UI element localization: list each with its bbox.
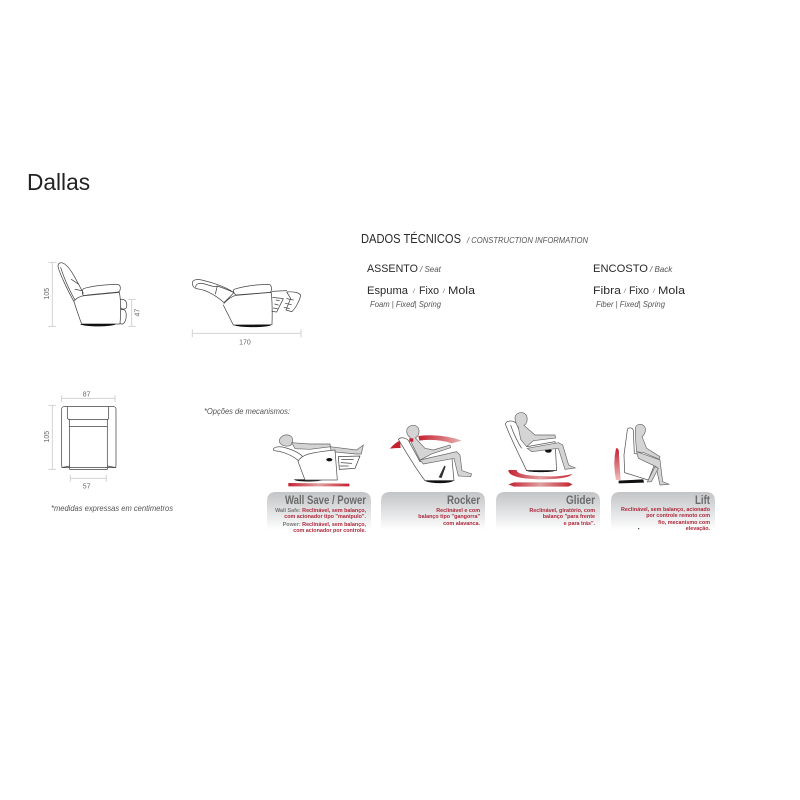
- drawing: side view upright: 47: [135, 309, 142, 317]
- note: measurements: *medidas expressas em centimetros: [51, 504, 173, 513]
- block: seat: Espuma: [367, 285, 409, 297]
- panel: wall save power: [267, 492, 371, 534]
- illustration: lift chair: [614, 424, 669, 485]
- block: seat: /: [412, 289, 416, 295]
- panel: rocker: Rocker: [447, 495, 480, 507]
- heading: technical data: / CONSTRUCTION INFORMATION: [466, 236, 588, 245]
- drawing: top view: 57: [83, 483, 91, 490]
- block: back: /: [623, 289, 627, 295]
- block: back: ENCOSTO: [593, 263, 648, 275]
- block: back: / Back: [649, 265, 673, 274]
- drawing: side view reclined: [192, 279, 301, 347]
- illustration: rocker chair: [390, 425, 472, 483]
- panel: wall save power: Wall Save / Power: [285, 495, 366, 507]
- panel: rocker: [381, 492, 485, 530]
- block: seat: ASSENTO: [367, 263, 418, 275]
- panel: lift: [611, 492, 715, 532]
- panel: rocker: Reclinável e com: [436, 508, 480, 514]
- block: seat: Mola: [448, 285, 476, 297]
- drawing: top view: 87: [83, 391, 91, 398]
- panel: glider: e para trás".: [564, 521, 595, 527]
- illustration: wall save reclined chair: [273, 435, 363, 486]
- panel: glider: Glider: [566, 495, 595, 507]
- drawing: top view: 105: [44, 431, 51, 442]
- label: mechanism options: *Opções de mecanismos:: [204, 407, 290, 416]
- block: seat: Fixo: [419, 285, 439, 297]
- drawing: side view upright: 105: [44, 288, 51, 299]
- heading: technical data: DADOS TÉCNICOS: [361, 231, 461, 246]
- panel: lift: elevação.: [686, 526, 710, 532]
- block: back: Mola: [658, 285, 686, 297]
- panel: wall save power: Power: Reclinável, sem balanço,: [283, 522, 366, 528]
- panel: lift: fio, mecanismo com: [658, 520, 710, 526]
- block: seat: /: [442, 289, 446, 295]
- drawing: side view upright: [44, 262, 142, 326]
- heading: technical data: [361, 231, 588, 246]
- block: back: /: [652, 289, 656, 295]
- block: seat: [367, 263, 476, 309]
- panel: wall save power: Wall Safe: Reclinável, sem balanço,: [275, 508, 366, 514]
- panel: glider: [496, 492, 600, 530]
- panel: lift: por controle remoto com: [646, 513, 710, 519]
- block: back: Fibra: [593, 285, 622, 297]
- block: back: Fiber | Fixed| Spring: [596, 300, 666, 309]
- drawing: top view: [44, 391, 116, 490]
- panel: rocker: balanço tipo "gangorra": [418, 514, 480, 520]
- drawing: side view reclined: 170: [239, 340, 251, 347]
- panel: glider: balanço "para frente: [543, 514, 595, 520]
- panel: rocker: com alavanca.: [443, 521, 481, 527]
- block: seat: / Seat: [419, 265, 442, 274]
- block: seat: Foam | Fixed| Spring: [370, 300, 442, 309]
- illustration: glider chair: [505, 413, 575, 487]
- panel: wall save power: com acionador por controle.: [293, 528, 366, 534]
- panel: glider: Reclinável, giratório, com: [529, 508, 595, 514]
- block: back: [593, 263, 686, 309]
- title: Dallas: [27, 169, 90, 195]
- block: back: Fixo: [629, 285, 649, 297]
- panel: lift: Lift: [695, 495, 710, 507]
- panel: lift: Reclinável, sem balanço, acionado: [621, 507, 711, 513]
- panel: wall save power: com acionador tipo "manipulo".: [284, 514, 366, 520]
